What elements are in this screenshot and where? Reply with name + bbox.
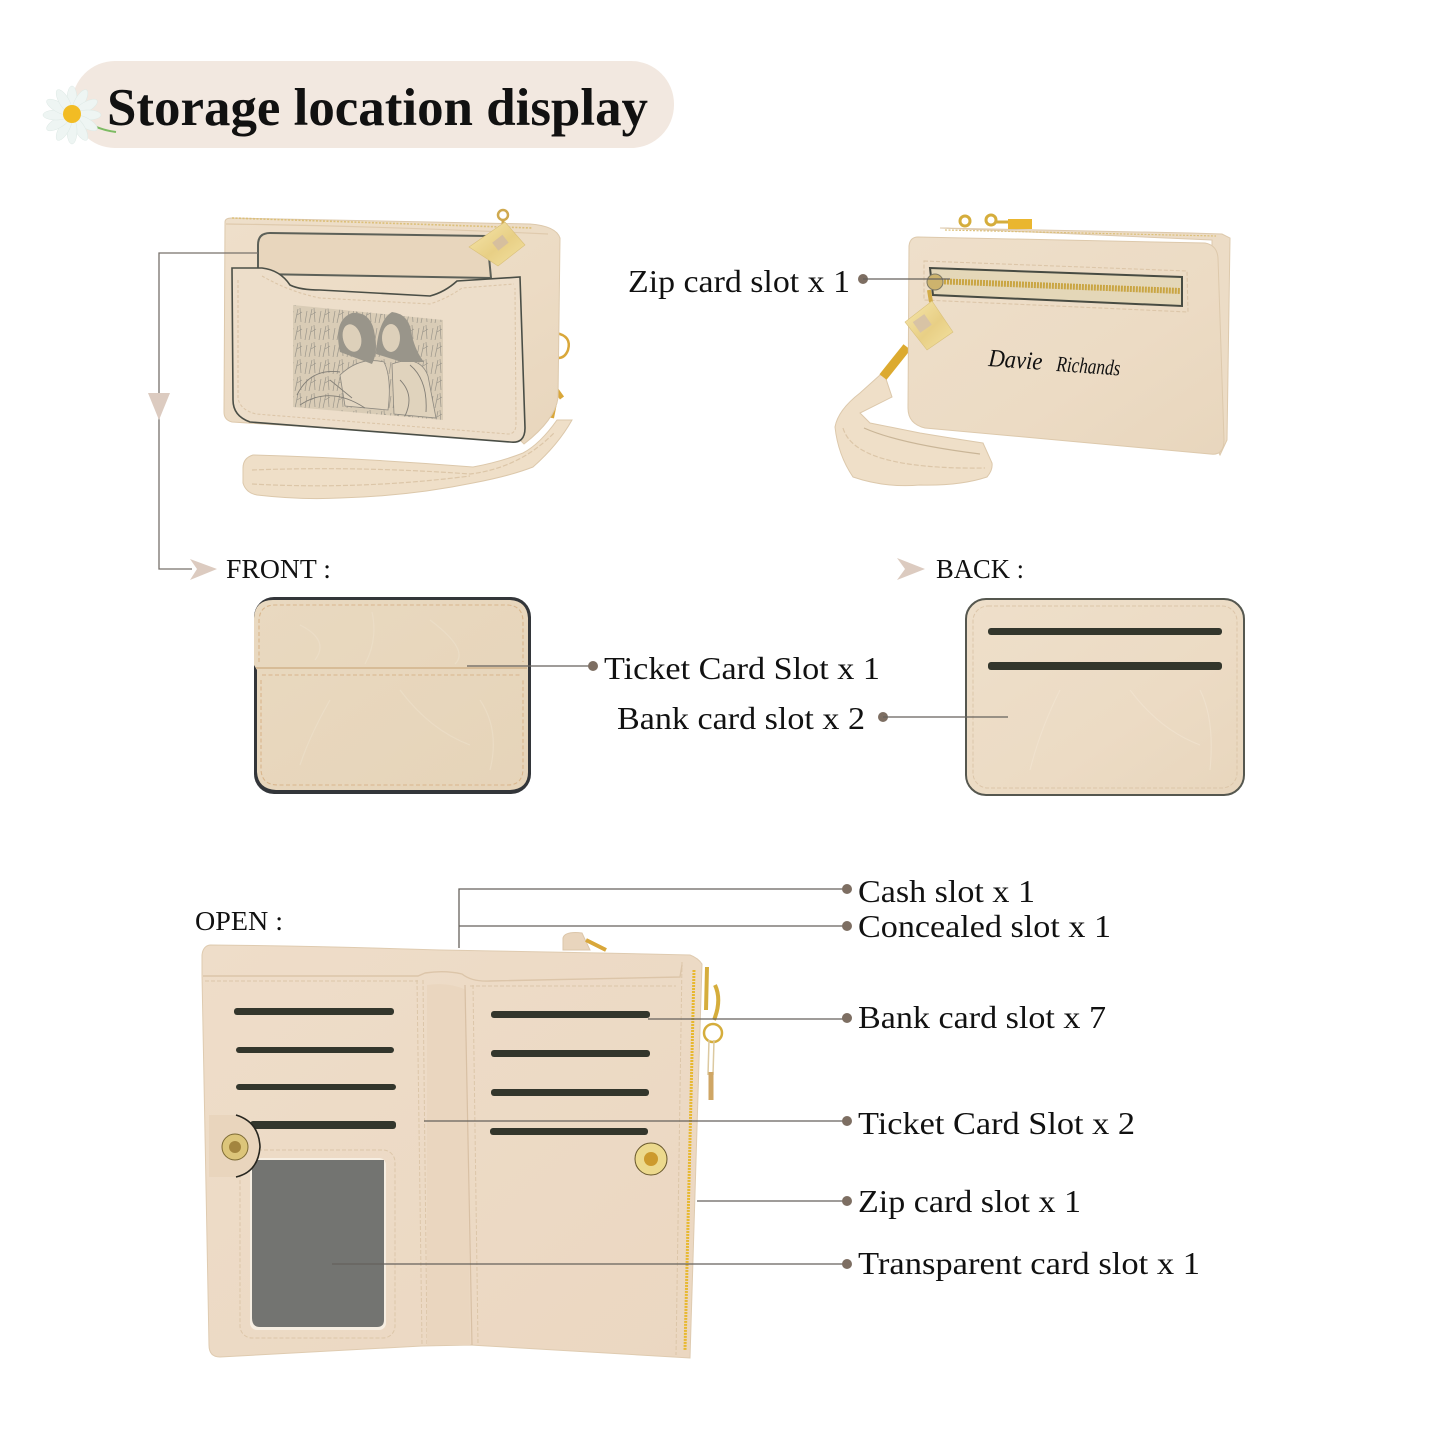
heading: front: FRONT : bbox=[226, 554, 331, 584]
label: ticket card slot (open) bbox=[424, 1105, 1135, 1141]
label: cash slot: Cash slot x 1 bbox=[858, 873, 1035, 909]
label: concealed slot: Concealed slot x 1 bbox=[858, 908, 1111, 944]
heading: back: BACK : bbox=[936, 554, 1024, 584]
zip pull bbox=[905, 274, 953, 350]
wallet body bbox=[202, 945, 702, 1358]
wrist strap bbox=[835, 375, 992, 486]
connector: front arrow bbox=[148, 253, 258, 580]
front pocket bbox=[232, 268, 525, 442]
photo: wallet front bbox=[224, 210, 572, 499]
zipper top hardware bbox=[960, 215, 1012, 226]
body bbox=[224, 218, 560, 444]
center gusset bbox=[427, 984, 470, 1345]
hook bbox=[883, 347, 907, 377]
label: ticket card slot (front) bbox=[467, 650, 880, 686]
title bbox=[43, 61, 674, 148]
engraved name: Davie bbox=[987, 345, 1043, 376]
zipper edge bbox=[685, 970, 694, 1350]
photo: wallet back bbox=[835, 215, 1230, 486]
snap button bbox=[635, 1143, 667, 1175]
label: transparent card slot bbox=[332, 1245, 1200, 1281]
label: zip card slot (open) bbox=[697, 1183, 1081, 1219]
rear panel bbox=[940, 228, 1230, 455]
label: concealed slot bbox=[459, 908, 1111, 944]
label: cash slot bbox=[459, 873, 1035, 948]
snap tab bbox=[209, 1115, 260, 1177]
right card slits bbox=[490, 1011, 650, 1135]
zip pull bbox=[469, 210, 525, 266]
label: bank card slot (back): Bank card slot x 2 bbox=[617, 700, 865, 736]
card holder: back bbox=[966, 599, 1244, 795]
wrist strap bbox=[243, 420, 572, 499]
left panel seam bbox=[417, 980, 427, 1345]
title: Storage location display bbox=[107, 79, 648, 137]
engraved portrait bbox=[293, 305, 443, 420]
label: bank card slot (open): Bank card slot x 7 bbox=[858, 999, 1106, 1035]
flap fold line bbox=[203, 965, 682, 981]
label: ticket card slot (front): Ticket Card Slot x 1 bbox=[604, 650, 880, 686]
card holder: front bbox=[254, 597, 531, 794]
label: transparent card slot: Transparent card slot x 1 bbox=[858, 1245, 1200, 1281]
engraved name bbox=[987, 345, 1121, 380]
label: zip card slot (back) bbox=[628, 263, 950, 299]
transparent window bbox=[240, 1150, 395, 1338]
heading: open: OPEN : bbox=[195, 906, 283, 936]
engraved name: Richands bbox=[1055, 351, 1121, 380]
strap hook bbox=[549, 333, 569, 418]
photo: wallet open bbox=[202, 933, 722, 1358]
label: zip card slot (open): Zip card slot x 1 bbox=[858, 1183, 1081, 1219]
label: bank card slot (back) bbox=[617, 700, 1008, 736]
label: zip card slot (back): Zip card slot x 1 bbox=[628, 263, 850, 299]
heading: back bbox=[897, 554, 1024, 584]
label: ticket card slot (open): Ticket Card Slot x 2 bbox=[858, 1105, 1135, 1141]
body bbox=[908, 237, 1224, 454]
icon: daisy bbox=[43, 86, 116, 144]
top loop and hardware bbox=[563, 933, 722, 1100]
label: bank card slot (open) bbox=[648, 999, 1106, 1035]
zip pocket bbox=[924, 261, 1188, 312]
left card slits bbox=[234, 1008, 396, 1129]
top zipper bbox=[232, 218, 532, 228]
upper pocket bbox=[258, 233, 491, 278]
